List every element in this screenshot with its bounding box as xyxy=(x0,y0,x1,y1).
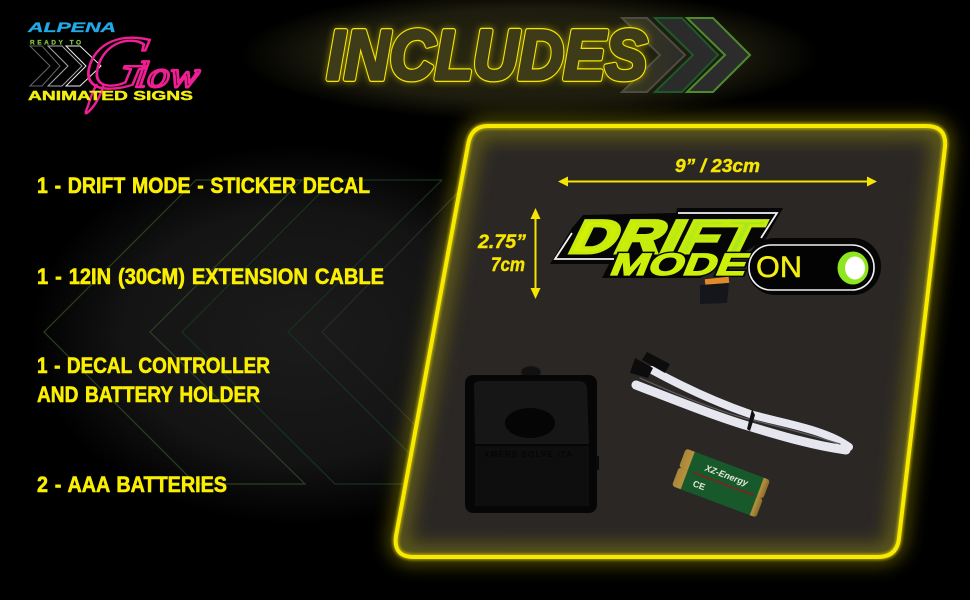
battery controller: XMERS SOLVE ITA xyxy=(484,450,572,459)
battery: top xyxy=(679,448,770,499)
extension cable xyxy=(630,352,849,450)
drift mode decal xyxy=(550,208,881,304)
logo: ready to: READY TO xyxy=(30,40,81,46)
item: controller: 1 - DECAL CONTROLLER xyxy=(37,353,270,378)
height dimension: 7cm xyxy=(491,255,525,276)
logo: glow script xyxy=(76,20,203,113)
decal: led xyxy=(838,252,868,284)
aaa batteries: XZ-Energy xyxy=(703,463,750,488)
item: batteries: 2 - AAA BATTERIES xyxy=(37,472,227,497)
item: controller xyxy=(37,353,270,407)
title: INCLUDES xyxy=(327,16,647,94)
background chevrons xyxy=(44,180,470,484)
logo: animated signs: ANIMATED SIGNS xyxy=(28,89,193,103)
decal: mode outline: MODE xyxy=(605,247,755,282)
item: controller: AND BATTERY HOLDER xyxy=(37,382,260,407)
item: decal: 1 - DRIFT MODE - STICKER DECAL xyxy=(37,173,370,198)
title: INCLUDES xyxy=(327,16,647,94)
arrow: width xyxy=(558,176,877,186)
arrow: height xyxy=(530,208,540,299)
aaa batteries xyxy=(672,448,770,518)
item: cable: 1 - 12IN (30CM) EXTENSION CABLE xyxy=(37,264,384,289)
logo: chevrons xyxy=(30,46,101,86)
height dimension xyxy=(477,208,540,299)
battery controller xyxy=(465,366,599,513)
background haze xyxy=(30,0,820,525)
panel xyxy=(396,126,945,557)
logo: glow script: low xyxy=(133,55,203,96)
height dimension: 2.75” xyxy=(477,232,527,253)
width dimension: 9” / 23cm xyxy=(675,156,760,176)
decal: on switch xyxy=(749,245,874,290)
logo xyxy=(26,19,203,113)
decal: mode text: MODE xyxy=(605,247,755,282)
logo: glow script: G xyxy=(76,20,158,105)
title: INCLUDES xyxy=(327,16,647,94)
drift mode decal: ON xyxy=(756,251,802,284)
battery: bottom xyxy=(672,467,763,518)
title chevrons xyxy=(622,18,750,92)
list of included items xyxy=(37,173,384,497)
width dimension xyxy=(558,156,877,186)
decal: drift text: DRIFT xyxy=(561,210,773,263)
decal: white accent lines xyxy=(555,213,777,259)
aaa batteries: CE xyxy=(691,479,707,492)
decal: connector xyxy=(700,277,729,304)
logo: Alpena wordmark: ALPENA xyxy=(26,19,116,35)
